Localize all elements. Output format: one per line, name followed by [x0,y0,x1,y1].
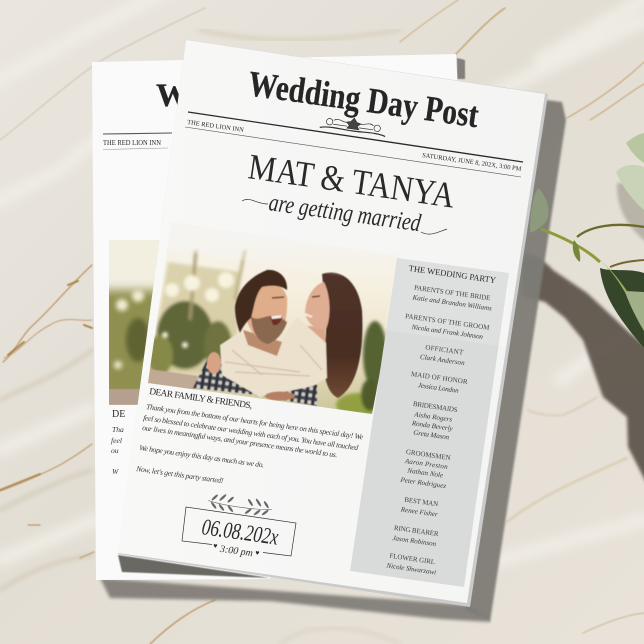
back page letter fragments: DE [112,409,125,420]
main stem [541,229,600,262]
parents of the bride: PARENTS OF THE BRIDE [414,284,491,302]
small leaf behind page edge [530,188,549,233]
best man: Renee Fisher [399,505,438,519]
flower girl: Nicole Shwarzawi [385,561,437,576]
curled leaf [573,240,580,262]
woman neck [307,326,326,342]
plant shadow on marble [522,183,644,490]
best man: BEST MAN [404,496,439,508]
woman face [305,282,330,330]
best man [399,496,439,519]
couple figures [193,270,362,406]
plant [530,133,644,348]
man plaid shirt [193,352,317,406]
masthead ornament [320,114,387,137]
bridesmaids: Greta Mason [413,429,450,442]
letter body [135,402,364,485]
page drop shadows [100,58,566,622]
laurel icon [207,491,273,518]
front page [118,40,548,607]
lower stem branch [610,260,644,267]
maid of honor: Jessica London [417,381,460,395]
man neck [243,330,282,356]
parents of the groom: PARENTS OF THE GROOM [405,312,491,332]
back page of program [92,54,458,580]
bridesmaids [410,400,458,442]
man beard [251,316,287,344]
woman brow and eye [312,296,320,297]
officiant: Clark Anderson [419,353,466,367]
maid of honor [410,370,468,395]
letter body: feel so blessed to celebrate our wedding with each of you. You have all touched [143,413,359,452]
dark leaf [600,268,644,348]
officiant [419,343,466,367]
upper stem branch [577,225,644,237]
party sidebar [350,258,509,587]
heart left: ♥ [213,542,218,550]
bokeh highlights [162,272,234,348]
parents of the groom [405,312,491,341]
ring bearer: RING BEARER [393,524,439,538]
thick masthead rule [188,112,523,162]
man eye [272,297,284,298]
heart right: ♥ [255,549,260,557]
photo fade [192,248,343,276]
couple photo [148,243,402,414]
man ear [240,307,250,321]
shadow of front page on back page [118,555,270,578]
back page venue label: THE RED LION INN [103,140,161,147]
subtitle flourishes [242,199,447,234]
thin masthead rule [185,127,521,177]
ring bearer [392,524,439,548]
couple names: MAT & TANYA [246,146,457,216]
sweater folds [225,345,322,376]
flower girl: FLOWER GIRL [389,552,436,566]
date: 06.08.202x [200,514,281,550]
letter heading: DEAR FAMILY & FRIENDS, [149,387,253,411]
letter body: our lives in meaningful ways, and your presence means the world to us. [142,423,338,459]
back page photo fragment [109,240,160,405]
ring bearer: Jason Robinson [392,534,437,548]
woman hair [322,272,362,398]
hand [207,352,221,374]
flower girl [385,552,437,576]
light leaf lower [600,261,644,331]
man hair [235,270,287,333]
letter body: We hope you enjoy this day as much as we do. [139,443,265,470]
back page letter fragments: feel [111,436,122,445]
bridesmaids: BRIDESMAIDS [412,400,458,414]
letter body: Thank you from the bottom of our hearts for being here on this special day! We [146,402,364,442]
gold veins top [455,8,505,55]
man face [246,282,287,343]
lower hand [265,392,295,400]
date label: SATURDAY, JUNE 8, 202X, 3:00 PM [422,152,522,173]
maid of honor: MAID OF HONOR [410,370,468,386]
sidebar heading: THE WEDDING PARTY [408,263,497,285]
woman smile [305,314,312,317]
groomsmen: Aaron Preston [403,457,449,471]
officiant: OFFICIANT [425,343,464,357]
masthead title: Wedding Day Post [246,63,481,135]
venue label: THE RED LION INN [187,119,244,134]
back page letter fragments: Tha [112,425,124,434]
back page masthead fragment: W [156,78,189,114]
parents of the bride [411,284,493,313]
bridesmaids: Aisha Rogers [413,410,453,424]
letter body: Now, let's get this party started! [135,464,225,485]
background trees left [147,250,245,375]
time: 3:00 pm [218,544,253,559]
groomsmen: GROOMSMEN [405,448,451,462]
background trees right [336,321,387,417]
back page rules [103,133,172,134]
back page letter fragments: W [112,467,119,476]
gold veins left [3,265,92,362]
dirt path [148,369,198,390]
back page letter fragments [111,409,125,476]
parents of the groom: Nicola and Frank Johnson [410,323,484,341]
parents of the bride: Katie and Brandon Williams [411,293,493,313]
groomsmen [399,448,451,490]
man mouth [270,315,282,325]
man teeth [271,315,282,319]
groomsmen: Peter Rodriguez [399,476,447,490]
date box [182,507,296,559]
back page thin rule [103,148,168,150]
bridesmaids: Ronda Beverly [410,419,454,433]
pale top leaves [616,165,644,210]
sweater arms [220,317,327,397]
back page letter fragments: ou [111,446,119,455]
groomsmen: Nathan Nole [406,466,444,479]
script subtitle: are getting married [267,189,423,237]
beige veins bottom right [507,458,627,522]
